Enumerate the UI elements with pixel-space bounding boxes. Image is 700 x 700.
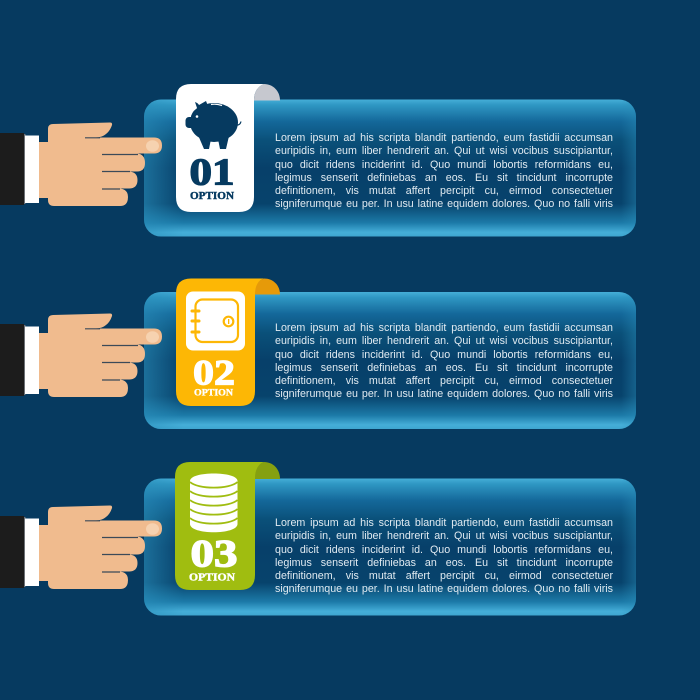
text block 3: quo dicit ridens inciderint id. Quo mundi lobortis reformidans eu, — [275, 544, 613, 556]
text block 2: definitionem, vis mutat affert percipit cu, eirmod consectetuer — [275, 375, 613, 387]
hand 1 pointing at option 01 — [0, 122, 162, 206]
number 02: 02 — [193, 352, 235, 392]
text block 2: euripidis in, eum liber hendrerit an. Qui ut wisi vocibus suscipiantur, — [275, 335, 613, 347]
icon: database stack — [190, 474, 238, 532]
text block 3: legimus senserit definiebas an eos. Eu sit tincidunt incorrupte — [275, 557, 613, 569]
label OPTION: OPTION — [190, 191, 235, 202]
hand 2 pointing at option 02 — [0, 314, 162, 397]
tag 02: yellow ribbon — [176, 278, 280, 406]
text block 2: signiferumque eu per. In usu latine equidem dolores. Quo no falli viris — [275, 388, 613, 400]
label OPTION: OPTION — [189, 572, 235, 584]
number 01: 01 — [190, 152, 234, 194]
panel 2 background — [144, 292, 636, 429]
text block 2 — [275, 322, 613, 400]
icon: piggy bank — [186, 101, 241, 149]
text block 1 — [275, 132, 613, 210]
text block 2: Lorem ipsum ad his scripta blandit partiendo, eum fastidii accumsan — [275, 322, 613, 334]
text block 1: euripidis in, eum liber hendrerit an. Qui ut wisi vocibus suscipiantur, — [275, 145, 613, 157]
text block 1: Lorem ipsum ad his scripta blandit partiendo, eum fastidii accumsan — [275, 132, 613, 144]
text block 2: legimus senserit definiebas an eos. Eu sit tincidunt incorrupte — [275, 362, 613, 374]
tag 01: white ribbon — [176, 84, 280, 212]
panel 1 background — [144, 100, 636, 236]
text block 1: signiferumque eu per. In usu latine equidem dolores. Quo no falli viris — [275, 198, 613, 210]
text block 1: legimus senserit definiebas an eos. Eu sit tincidunt incorrupte — [275, 172, 613, 184]
text block 3: euripidis in, eum liber hendrerit an. Qui ut wisi vocibus suscipiantur, — [275, 530, 613, 542]
number 03: 03 — [190, 532, 238, 576]
hand 3 pointing at option 03 — [0, 506, 162, 589]
text block 3 — [275, 517, 613, 595]
text block 1: quo dicit ridens inciderint id. Quo mundi lobortis reformidans eu, — [275, 159, 613, 171]
text block 1: definitionem, vis mutat affert percipit cu, eirmod consectetuer — [275, 185, 613, 197]
panel 3 background — [144, 478, 636, 616]
text block 2: quo dicit ridens inciderint id. Quo mundi lobortis reformidans eu, — [275, 349, 613, 361]
text block 3: Lorem ipsum ad his scripta blandit partiendo, eum fastidii accumsan — [275, 517, 613, 529]
text block 3: definitionem, vis mutat affert percipit cu, eirmod consectetuer — [275, 570, 613, 582]
tag 03: green ribbon — [175, 462, 280, 590]
icon: safe — [186, 292, 245, 350]
label OPTION: OPTION — [194, 388, 233, 398]
text block 3: signiferumque eu per. In usu latine equidem dolores. Quo no falli viris — [275, 583, 613, 595]
